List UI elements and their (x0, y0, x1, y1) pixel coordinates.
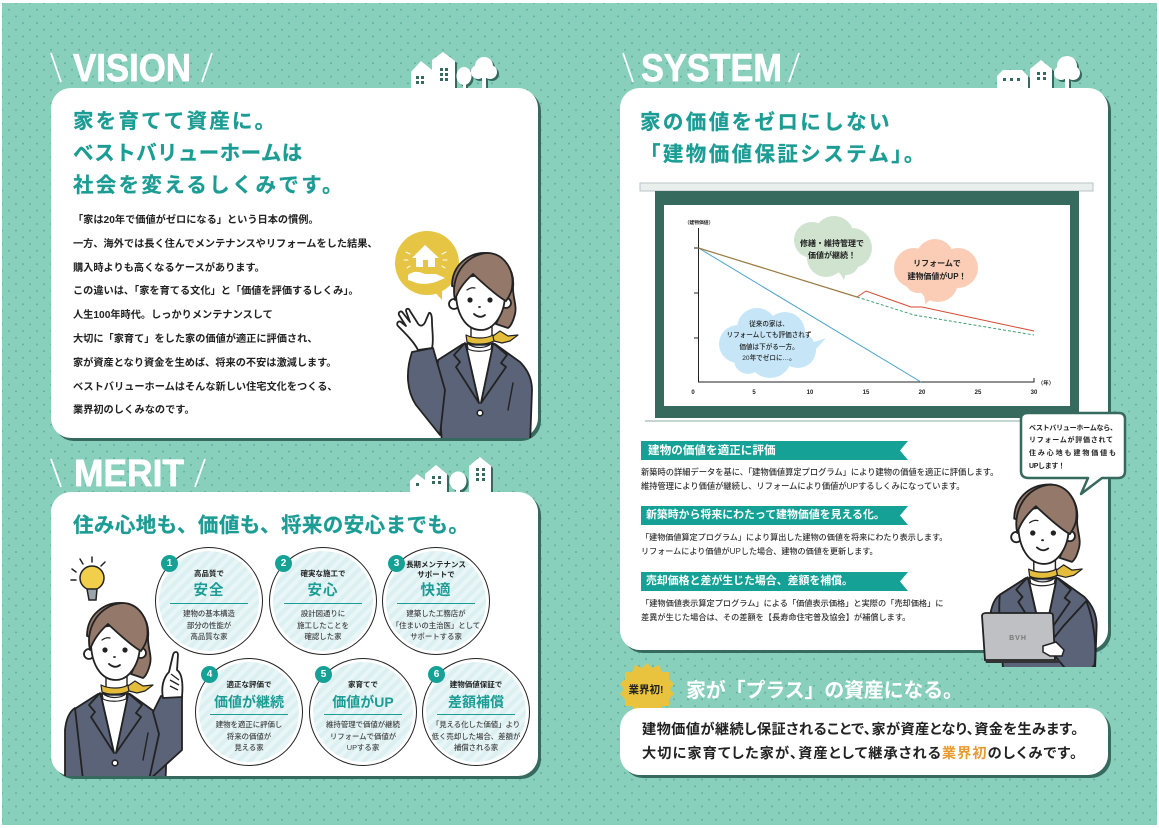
cloud callout: green (794, 216, 872, 280)
speech bubble: リフォームが評価されて (1029, 435, 1113, 444)
callout panel: 建物価値が継続し保証されることで、家が資産となり、資金を生みます。 (642, 722, 1079, 738)
vision body text (73, 214, 378, 416)
chart lines (698, 248, 1034, 382)
chart: building value on projection screen: 10 (807, 390, 814, 396)
section heading: VISION: VISION (73, 47, 191, 90)
section text 1: 新築時の詳細データを基に、「建物価値算定プログラム」により建物の価値を適正に評価します。 (641, 468, 998, 477)
merit circle 3: 建築した工務店が (406, 609, 466, 618)
merit circle 4: 見える家 (234, 743, 264, 752)
section text 1: 維持管理により価値が継続し、リフォームにより価値がUPするしくみになっています。 (641, 482, 964, 491)
chart: building value on projection screen: 修繕・維持管理で (800, 238, 864, 248)
merit circle 5: 家育てで (348, 680, 378, 689)
merit circle 6: 「見える化した価値」より (432, 720, 520, 729)
merit circle 6: 6 (434, 669, 439, 680)
icon: light bulb (70, 556, 106, 601)
merit circle 5: リフォームで価値が (330, 732, 396, 741)
chart: building value on projection screen: 価値は下がる一方。 (739, 342, 799, 351)
vision heading: 家を育てて資産に。 (73, 110, 277, 133)
merit circle 4: 将来の価値が (227, 732, 271, 741)
callout panel (620, 708, 1108, 775)
speech bubble: ベストバリューホームなら、 (1029, 423, 1117, 432)
merit circle 4: 建物を適正に評価し (216, 720, 282, 729)
merit circle 2: 確実な施工で (300, 569, 346, 578)
section heading: SYSTEM: SYSTEM (641, 47, 782, 90)
panel: vision (51, 88, 538, 438)
section bar 2 (641, 506, 908, 525)
illustration: system presenter with laptop (981, 484, 1098, 667)
section text 2: リフォームにより価値がUPした場合、建物の価値を更新します。 (641, 547, 878, 556)
merit circle 2: 設計図通りに (301, 609, 345, 618)
section text 3 (641, 599, 943, 622)
merit circle 2: 施工したことを (297, 621, 349, 630)
vision body text: ベストバリューホームはそんな新しい住宅文化をつくる、 (73, 382, 338, 393)
vision heading (73, 110, 345, 197)
vision body text: 「家は20年で価値がゼロになる」という日本の慣例。 (73, 215, 319, 226)
cloud callout: pink (894, 239, 978, 304)
chart: building value on projection screen: （建物価値） (685, 219, 713, 226)
section heading: MERIT: MERIT (74, 453, 184, 495)
vision body text: 人生100年時代。しっかりメンテナンスして (73, 310, 273, 321)
panel: merit (51, 492, 538, 776)
illustration: merit presenter pointing (64, 602, 184, 776)
merit circle 3: 快適 (420, 583, 452, 599)
callout heading: 家が「プラス」の資産になる。 (686, 680, 963, 702)
merit circle 3: 長期メンテナンス (406, 560, 466, 569)
merit circle 2: 確認した家 (305, 632, 341, 641)
chart: building value on projection screen: 価値が継続！ (808, 250, 856, 260)
merit circle 5 (309, 658, 417, 766)
merit circle 6: 差額補償 (448, 694, 504, 710)
merit circle 6: 建物価値保証で (450, 680, 502, 689)
merit circle 3 (382, 547, 490, 655)
vision body text: 一方、海外では長く住んでメンテナンスやリフォームをした結果、 (73, 239, 378, 250)
chart: building value on projection screen: 15 (863, 390, 870, 396)
chart: building value on projection screen: 30 (1031, 390, 1038, 396)
chart: building value on projection screen: 20 (919, 390, 926, 396)
icon: house on hand speech bubble (395, 231, 459, 300)
section bar 3 (641, 572, 908, 591)
system heading: 「建物価値保証システム」。 (640, 143, 927, 166)
merit circle 1: 安全 (194, 583, 224, 599)
merit circle 1: 建物の基本構造 (183, 609, 235, 618)
section text 2: 「建物価値算定プログラム」により算出した建物の価値を将来にわたり表示します。 (641, 533, 947, 542)
merit circle 3: 3 (394, 558, 399, 569)
chart axes (694, 228, 1034, 382)
merit circle 5: 維持管理で価値が継続 (326, 720, 400, 729)
merit circle 2 (269, 547, 377, 655)
merit circle 1 (155, 547, 263, 655)
section text 1 (641, 467, 998, 491)
merit circle 5: UPする家 (347, 743, 379, 752)
merit circle 6 (422, 658, 530, 766)
system heading (640, 111, 927, 166)
badge: industry first: 業界初! (628, 683, 664, 696)
section text 3: 「建物価値表示算定プログラム」による「価値表示価格」と実際の「売却価格」に (641, 599, 943, 608)
merit heading: 住み心地も、価値も、将来の安心までも。 (73, 514, 469, 537)
chart: building value on projection screen: リフォームしても評価されず (726, 330, 812, 339)
merit circle 2: 安心 (308, 583, 338, 599)
vision body text: 購入時よりも高くなるケースがあります。 (73, 263, 265, 274)
merit circle 1: 高品質で (194, 569, 224, 578)
chart: building value on projection screen: 20年でゼロに…。 (742, 353, 796, 362)
chart: building value on projection screen: （年） (1038, 379, 1054, 387)
panel: system (620, 88, 1108, 650)
merit circle 3: サポートで (417, 570, 455, 579)
section bar 2: 新築時から将来にわたって建物価値を見える化。 (646, 509, 885, 521)
merit circle 1: 高品質な家 (191, 632, 227, 641)
chart: building value on projection screen: 0 (691, 390, 695, 396)
chart: building value on projection screen: 従来の家は、 (749, 319, 789, 328)
merit circle 1: 1 (167, 558, 172, 569)
speech bubble: 住み心地も建物価値も (1029, 448, 1116, 457)
illustration: vision presenter (396, 252, 533, 438)
merit circle 3: サポートする家 (410, 632, 462, 641)
merit circle 6: 低く売却した場合、差額が (432, 732, 520, 741)
vision body text: 家が資産となり資金を生めば、将来の不安は激減します。 (73, 358, 337, 369)
merit circle 2: 2 (281, 558, 286, 569)
vision body text: 業界初のしくみなのです。 (73, 405, 195, 416)
vision body text: この違いは、「家を育てる文化」と「価値を評価するしくみ」。 (73, 286, 359, 297)
chart: building value on projection screen: 建物価値がUP！ (907, 271, 967, 281)
section text 3: 差異が生じた場合は、その差額を【長寿命住宅普及協会】が補償します。 (641, 613, 910, 622)
section bar 1: 建物の価値を適正に評価 (648, 444, 776, 457)
illustration: system presenter with laptop: BVH (1009, 635, 1027, 642)
merit circle 4: 4 (207, 669, 212, 680)
speech bubble: UPします！ (1029, 462, 1065, 470)
badge: industry first (620, 663, 674, 710)
merit circle 3: 「住まいの主治医」として (392, 621, 480, 630)
merit circle 5: 5 (321, 669, 326, 680)
merit circle 1: 部分の性能が (187, 621, 231, 630)
chart: building value on projection screen: 5 (752, 390, 756, 396)
merit circle 4: 適正な評価で (226, 680, 272, 689)
cloud callout: blue (719, 308, 826, 378)
merit circle 4: 価値が継続 (214, 694, 284, 710)
merit circle 4 (195, 658, 303, 766)
section text 2 (641, 533, 947, 556)
merit circle 5: 価値がUP (332, 694, 394, 710)
chart: building value on projection screen: 25 (975, 390, 982, 396)
merit circle 6: 補償される家 (454, 743, 498, 752)
vision body text: 大切に「家育て」をした家の価値が適正に評価され、 (73, 334, 318, 345)
vision heading: ベストバリューホームは (73, 142, 303, 165)
system heading: 家の価値をゼロにしない (640, 111, 892, 134)
chart: building value on projection screen: リフォームで (913, 259, 961, 268)
section bar 1 (641, 441, 908, 460)
vision heading: 社会を変えるしくみです。 (73, 174, 345, 197)
section bar 3: 売却価格と差が生じた場合、差額を補償。 (646, 575, 853, 587)
callout panel: 大切に家育てした家が、資産として継承される業界初のしくみです。 (642, 746, 1078, 762)
